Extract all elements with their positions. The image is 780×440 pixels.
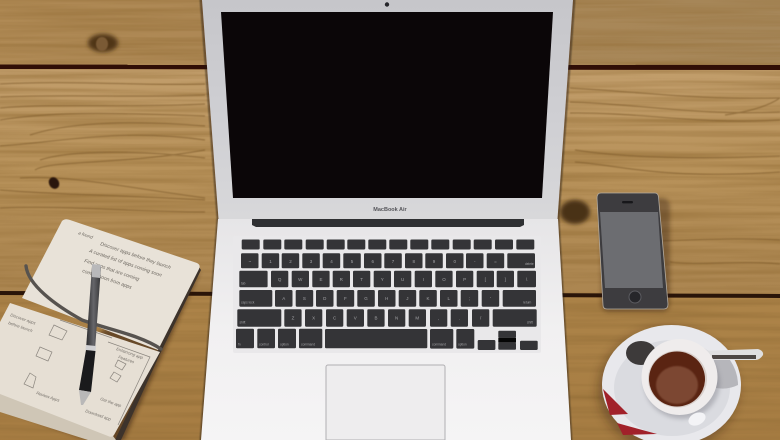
key legends: 5 xyxy=(351,259,354,264)
handwriting on lower page: Enhancing app xyxy=(116,346,144,360)
phone speaker xyxy=(622,201,633,203)
key legends: 8 xyxy=(412,259,415,264)
spoon bowl xyxy=(626,341,656,365)
key legends: O xyxy=(442,277,446,282)
key legends: B xyxy=(374,316,378,320)
top plank xyxy=(0,0,780,69)
notebook xyxy=(0,219,201,440)
laptop shadow xyxy=(200,0,575,440)
coffee crema highlight xyxy=(656,366,698,404)
keyboard well xyxy=(233,236,541,353)
key legends: 1 xyxy=(269,259,272,264)
elastic band xyxy=(26,266,161,349)
spoon shadow band xyxy=(712,355,756,359)
black screen xyxy=(221,12,553,198)
key legends: ; xyxy=(469,296,470,301)
key legends: tab xyxy=(241,282,246,286)
key legends: C xyxy=(333,316,337,320)
handwriting on upper page: A curated list of apps coming soon xyxy=(87,248,163,279)
bottom plank xyxy=(0,292,780,440)
key legends: return xyxy=(523,300,532,304)
page stack bottom edge xyxy=(0,392,116,440)
key legends: ] xyxy=(505,277,506,282)
knot centre xyxy=(96,37,108,51)
saucer red pattern top xyxy=(603,389,628,415)
coffee cup and saucer xyxy=(598,325,763,440)
number key row xyxy=(241,253,535,268)
coffee xyxy=(649,352,705,406)
phone shadow xyxy=(601,198,670,312)
key legends: 2 xyxy=(289,259,292,264)
notebook cover edge xyxy=(115,267,201,440)
key legends: - xyxy=(474,259,476,264)
sketches on lower page xyxy=(24,320,150,425)
phone screen xyxy=(600,212,663,288)
handwriting on lower page: before launch xyxy=(8,320,34,333)
keyboard xyxy=(236,240,538,350)
camera xyxy=(385,2,389,7)
key legends: shift xyxy=(527,320,533,324)
handwriting on lower page: Download app xyxy=(85,408,112,422)
saucer glare xyxy=(686,410,708,428)
handwriting on upper page: Find apps that are coming xyxy=(83,258,140,283)
saucer shadow xyxy=(598,328,738,440)
brand label: MacBook Air xyxy=(373,207,408,213)
bottom key row with space bar and arrows xyxy=(236,329,538,350)
key legends: = xyxy=(494,259,497,264)
key legends: 0 xyxy=(453,259,456,264)
key legends: control xyxy=(259,342,269,346)
key legends: H xyxy=(385,296,388,301)
key legends: Z xyxy=(292,316,295,320)
key legends: 7 xyxy=(392,259,395,264)
middle plank xyxy=(0,66,780,296)
cup handle xyxy=(714,360,738,389)
coffee inner ring xyxy=(648,350,707,408)
phone body xyxy=(597,193,668,309)
handwriting on lower page: Review Apps xyxy=(36,390,61,403)
saucer xyxy=(602,325,741,440)
key legends: ' xyxy=(490,296,491,301)
upper plank gap xyxy=(0,64,780,70)
home key row xyxy=(239,290,536,307)
key legends: S xyxy=(303,296,306,301)
key legends: 3 xyxy=(310,259,313,264)
key legends: command xyxy=(432,342,446,346)
key legends: caps lock xyxy=(241,300,255,304)
trackpad xyxy=(326,365,445,440)
saucer red pattern bottom xyxy=(617,423,657,435)
knot: mid plank small xyxy=(47,175,61,191)
key legends: \ xyxy=(526,277,528,282)
key legends: [ xyxy=(485,277,487,282)
key legends: E xyxy=(319,277,323,282)
smartphone xyxy=(597,193,670,312)
key legends: G xyxy=(364,296,368,301)
phone home button xyxy=(629,291,641,303)
laptop base xyxy=(201,219,571,440)
key legends: Y xyxy=(381,277,384,282)
lower plank gap xyxy=(0,291,780,298)
key legends: option xyxy=(280,342,289,346)
key legends: R xyxy=(340,277,344,282)
saucer inner shade xyxy=(614,340,730,436)
key legends: N xyxy=(395,316,398,320)
handwriting on upper page: a found xyxy=(78,230,94,240)
cup shadow xyxy=(644,347,720,419)
key legends: V xyxy=(354,316,357,320)
key legends: M xyxy=(415,316,419,320)
key legends: D xyxy=(323,296,327,301)
key legends: 6 xyxy=(371,259,374,264)
key legends: Q xyxy=(278,277,282,282)
notebook shadow xyxy=(0,272,200,440)
key legends: shift xyxy=(240,320,245,324)
key legends: / xyxy=(480,316,482,320)
key legends: command xyxy=(301,342,315,346)
key legends: fn xyxy=(238,342,241,346)
handwriting on lower page: Get the app xyxy=(100,396,123,408)
spoon handle xyxy=(700,349,763,360)
handwriting on lower page: Features xyxy=(118,354,136,365)
key legends: P xyxy=(463,277,466,282)
function key row xyxy=(242,240,534,250)
lower page xyxy=(0,303,160,437)
upper page xyxy=(22,219,200,350)
key legends: delete xyxy=(525,262,534,266)
handwriting on lower page: Discover apps xyxy=(10,312,37,326)
qwerty key row xyxy=(239,271,536,287)
key legends: 9 xyxy=(433,259,436,264)
key legends: F xyxy=(344,296,347,301)
pen metal ring xyxy=(86,345,96,351)
key legends: ~ xyxy=(248,259,251,264)
key legends: option xyxy=(458,342,467,346)
handwriting on upper page: Discover apps before they launch xyxy=(99,241,172,271)
key legends: T xyxy=(360,277,363,282)
handwriting on lower page xyxy=(8,312,144,422)
key legends: . xyxy=(459,316,460,320)
key legends: , xyxy=(438,316,439,320)
shift key row xyxy=(237,309,537,327)
key legends: L xyxy=(447,296,450,301)
hinge xyxy=(252,219,524,227)
pen top clip xyxy=(92,264,101,278)
key legends: U xyxy=(401,277,404,282)
pen xyxy=(79,264,101,405)
key legends: W xyxy=(298,277,303,282)
knot: beside laptop xyxy=(560,200,590,224)
key legends xyxy=(238,259,534,346)
cup rim xyxy=(642,339,718,415)
key legends: K xyxy=(426,296,430,301)
key legends: J xyxy=(406,296,409,301)
key legends: X xyxy=(312,316,315,320)
knot halo xyxy=(88,34,118,52)
key legends: A xyxy=(282,296,285,301)
wavy grain lines xyxy=(0,83,780,264)
key legends: I xyxy=(423,277,424,282)
pen grip xyxy=(79,350,96,392)
laptop lid and bezel xyxy=(202,0,573,219)
knot: top plank xyxy=(88,34,118,52)
laptop xyxy=(200,0,575,440)
handwriting on upper page xyxy=(78,230,172,291)
pen tip xyxy=(79,390,91,405)
handwriting on upper page: coming soon from apps xyxy=(81,268,133,291)
pen body xyxy=(86,266,101,350)
key legends: 4 xyxy=(330,259,333,264)
